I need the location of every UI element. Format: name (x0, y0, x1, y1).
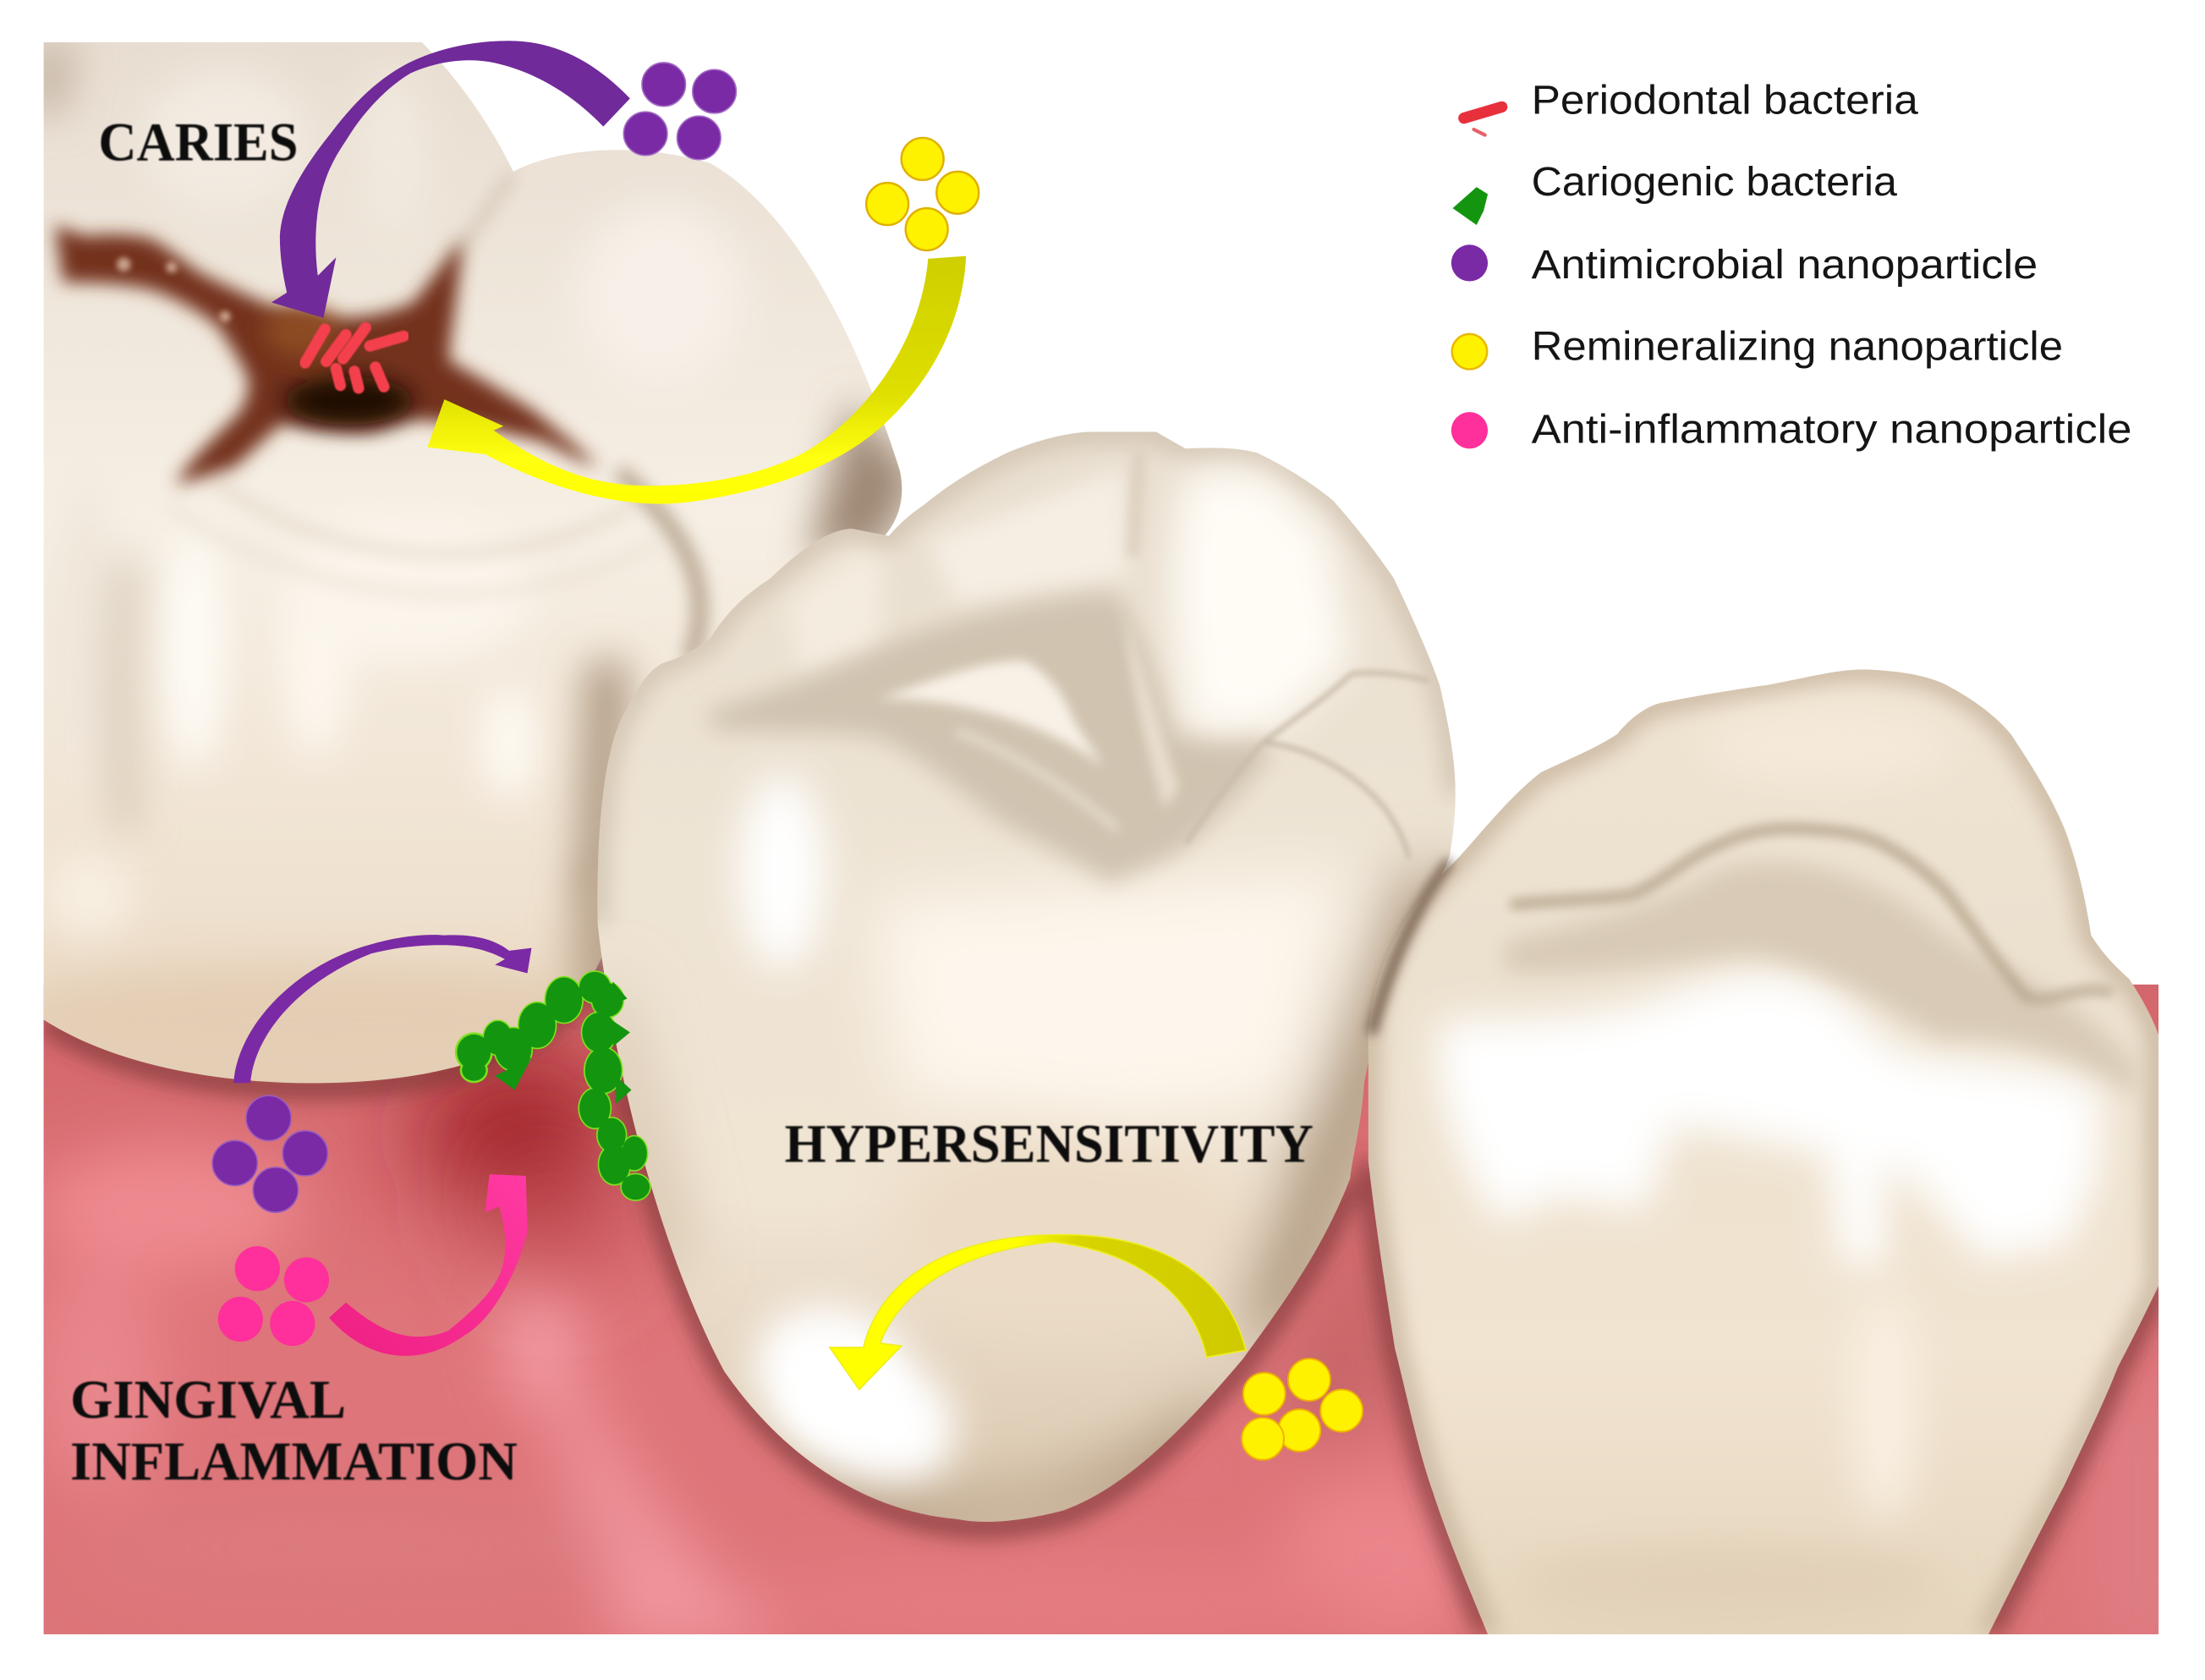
purple nanoparticle cluster: caries (623, 63, 736, 160)
periodontal bacteria cluster (305, 327, 403, 388)
crown ridge (1505, 828, 2137, 1097)
yellow nanoparticle cluster: hypersensitivity (1242, 1359, 1363, 1460)
legend item: cariogenic bacteria (1452, 159, 1897, 225)
occlusal fissures (710, 450, 1429, 883)
arrow: anti-inflammatory nanoparticles to gingiva (329, 1174, 527, 1356)
remineralization white spot (754, 1306, 954, 1481)
legend item: anti-inflammatory nanoparticle: Anti-inflammatory nanoparticle (1532, 407, 2132, 453)
gum tissue (36, 924, 2180, 1645)
heading: gingival inflammation: GINGIVAL (70, 1370, 346, 1430)
legend item: antimicrobial nanoparticle: Antimicrobial nanoparticle (1532, 242, 2038, 288)
heading: caries: CARIES (98, 113, 298, 173)
legend item: periodontal bacteria: Periodontal bacteria (1532, 78, 1918, 124)
legend (1451, 78, 2132, 453)
legend item: periodontal bacteria (1464, 78, 1918, 135)
legend item: remineralizing nanoparticle: Remineralizing nanoparticle (1532, 324, 2063, 370)
arrow: remineralizing nanoparticles to hypersensitivity (830, 1235, 1246, 1390)
pink nanoparticle cluster: gingiva (218, 1246, 329, 1346)
heading: gingival inflammation: INFLAMMATION (70, 1431, 518, 1492)
arrow: antimicrobial nanoparticles to gingiva (233, 935, 531, 1083)
crown highlights (1438, 973, 2103, 1265)
inflamed gum area (419, 1055, 626, 1280)
arrow: remineralizing nanoparticles to caries (427, 256, 966, 504)
heading: gingival inflammation (70, 1370, 518, 1492)
cariogenic bacteria chain (455, 970, 651, 1201)
right tooth (1350, 661, 2165, 1645)
middle tooth (590, 422, 1477, 1547)
carious lesion (55, 225, 598, 486)
arrow: antimicrobial nanoparticles to caries (272, 41, 630, 318)
tooth shadows on gum (44, 924, 2158, 1634)
legend item: cariogenic bacteria: Cariogenic bacteria (1532, 159, 1897, 205)
heading: hypersensitivity: HYPERSENSITIVITY (785, 1113, 1314, 1174)
back tooth with caries (44, 42, 902, 1083)
purple nanoparticle cluster: gingiva (212, 1095, 327, 1212)
contact shadow between middle and right teeth (1371, 861, 1450, 1034)
yellow nanoparticle cluster: caries (866, 138, 979, 250)
